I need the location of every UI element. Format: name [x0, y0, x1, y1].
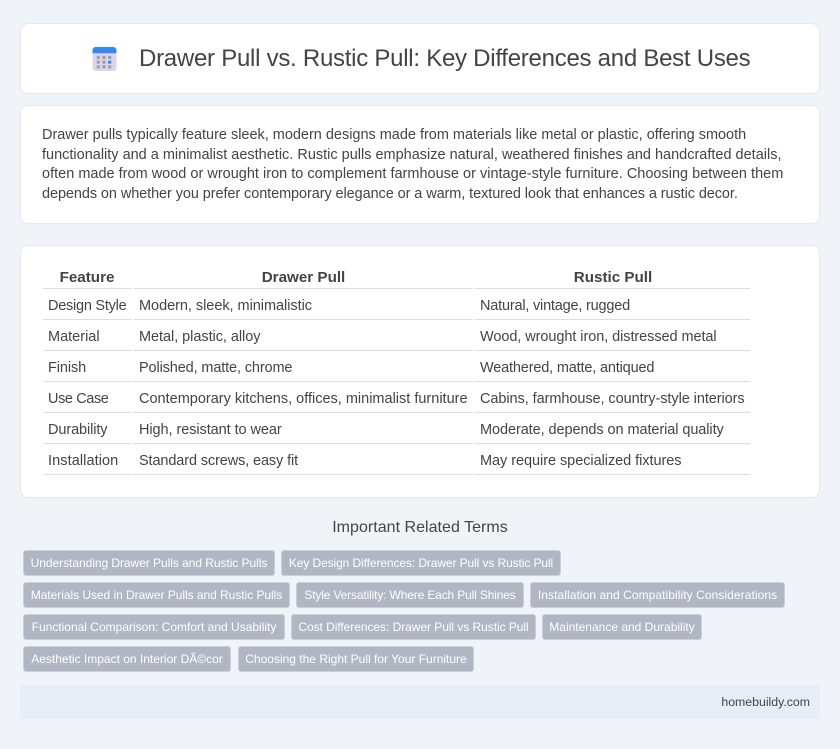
related terms tags: Key Design Differences: Drawer Pull vs Rustic Pull: [289, 556, 553, 570]
row: installation: [48, 453, 682, 469]
intro paragraph: often made from wood or wrought iron to complement farmhouse or vintage-style furniture. Choosing between them: [42, 166, 783, 182]
row: installation: May require specialized fixtures: [480, 453, 682, 469]
table header: Drawer Pull: [262, 269, 345, 286]
related terms tags: Maintenance and Durability: [549, 620, 695, 634]
header panel: [20, 23, 820, 94]
intro paragraph: depends on whether you prefer contemporary elegance or a warm, textured look that enhances a rustic decor.: [42, 186, 738, 202]
row: durability: Durability: [48, 422, 107, 438]
intro paragraph: Drawer pulls typically feature sleek, modern designs made from materials like metal or plastic, offering smooth: [42, 127, 746, 143]
title: Drawer Pull vs. Rustic Pull: Key Differences and Best Uses: [139, 45, 750, 72]
related terms tags: Style Versatility: Where Each Pull Shines: [304, 588, 516, 602]
row: durability: High, resistant to wear: [139, 422, 282, 438]
row: finish: Weathered, matte, antiqued: [480, 360, 654, 376]
comparison table panel: [20, 245, 820, 498]
related terms tags: Functional Comparison: Comfort and Usability: [32, 620, 276, 634]
row: material: Wood, wrought iron, distressed metal: [480, 329, 717, 345]
footer source: homebuildy.com: [721, 695, 810, 709]
intro paragraph: [42, 127, 783, 202]
row: use case: Use Case: [48, 391, 108, 407]
row: installation: Standard screws, easy fit: [139, 453, 298, 469]
row: finish: Polished, matte, chrome: [139, 360, 292, 376]
row: use case: [48, 391, 745, 407]
row: use case: Cabins, farmhouse, country-style interiors: [480, 391, 745, 407]
related terms tags: Choosing the Right Pull for Your Furniture: [245, 652, 467, 666]
related terms tags: Aesthetic Impact on Interior DÃ©cor: [31, 652, 223, 666]
footer bar: [20, 685, 820, 719]
row: finish: Finish: [48, 360, 86, 376]
table header: [60, 269, 652, 286]
row: installation: Installation: [48, 453, 118, 469]
row: material: Material: [48, 329, 100, 345]
intro paragraph: functionality and a minimalist aesthetic. Rustic pulls emphasize natural, weathered finishes and handcrafted details,: [42, 147, 781, 163]
related terms tags: Installation and Compatibility Considerations: [538, 588, 777, 602]
intro text panel: [20, 105, 820, 224]
related terms tags: Cost Differences: Drawer Pull vs Rustic Pull: [298, 620, 529, 634]
related terms tags: [23, 550, 785, 672]
row: material: Metal, plastic, alloy: [139, 329, 260, 345]
row: material: [48, 329, 717, 345]
related terms tags: Materials Used in Drawer Pulls and Rustic Pulls: [31, 588, 282, 602]
related terms tags: Understanding Drawer Pulls and Rustic Pulls: [31, 556, 267, 570]
row: design style: Natural, vintage, rugged: [480, 298, 630, 314]
row: use case: Contemporary kitchens, offices, minimalist furniture: [139, 391, 468, 407]
comparison table: [43, 269, 750, 475]
related terms heading: Important Related Terms: [332, 519, 508, 536]
row: finish: [48, 360, 654, 376]
row: design style: Design Style: [48, 298, 126, 314]
row: durability: [48, 422, 724, 438]
icon: calendar: [92, 47, 116, 71]
row: design style: [48, 298, 630, 314]
row: durability: Moderate, depends on material quality: [480, 422, 724, 438]
table header: Rustic Pull: [574, 269, 652, 286]
row: design style: Modern, sleek, minimalistic: [139, 298, 312, 314]
table header: Feature: [60, 269, 114, 286]
